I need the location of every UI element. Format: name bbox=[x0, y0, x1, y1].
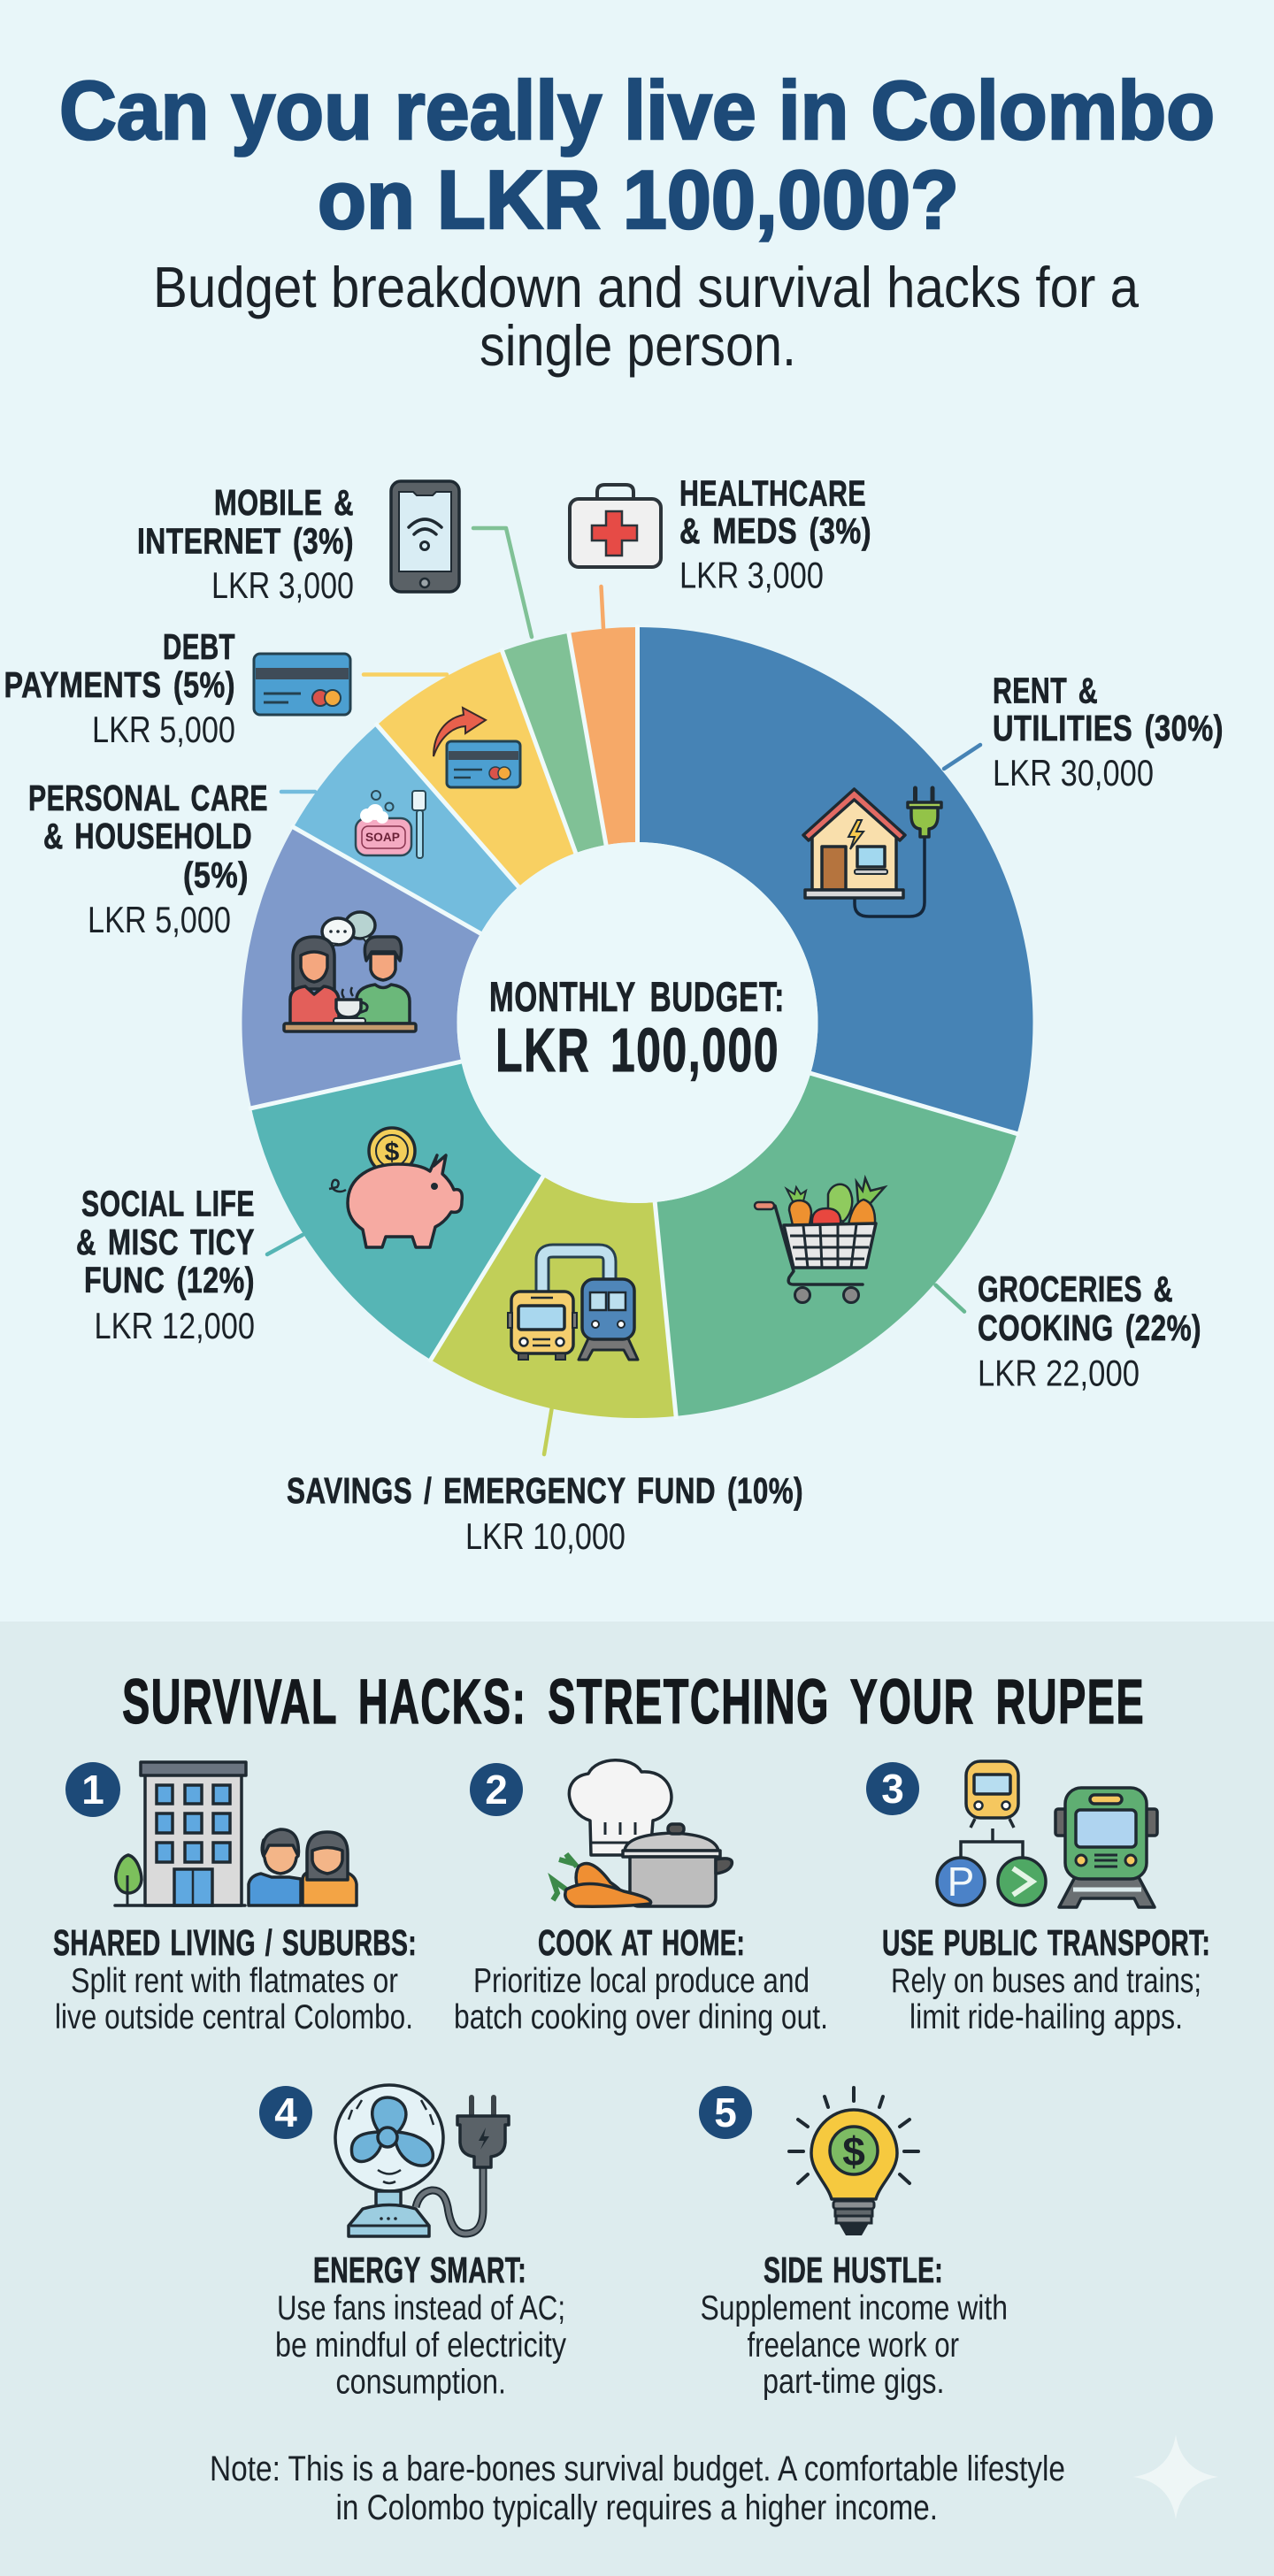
label: rent and utilities: LKR 30,000 bbox=[993, 752, 1154, 794]
label: social life and misc: LKR 12,000 bbox=[94, 1305, 255, 1346]
footnote bbox=[210, 2450, 1065, 2527]
label: savings and emergency fund: LKR 10,000 bbox=[465, 1515, 625, 1557]
text: cook at home: Prioritize local produce and bbox=[473, 1962, 810, 2000]
text: cook at home: batch cooking over dining out. bbox=[454, 1998, 828, 2036]
leader line: rent bbox=[944, 745, 980, 769]
label: groceries and cooking: LKR 22,000 bbox=[978, 1352, 1140, 1394]
icon: medical kit bbox=[570, 485, 661, 567]
icon: soap and toothbrush: SOAP bbox=[365, 830, 400, 844]
label: healthcare and meds: HEALTHCARE bbox=[679, 472, 866, 513]
leader line: social bbox=[267, 1235, 303, 1254]
leader line: debt bbox=[364, 672, 447, 677]
badge 4: 4 bbox=[274, 2089, 297, 2135]
label: mobile and internet bbox=[137, 482, 354, 606]
subtitle: Budget breakdown and survival hacks for a bbox=[153, 255, 1140, 319]
leader line: savings bbox=[544, 1409, 552, 1454]
footnote: in Colombo typically requires a higher income. bbox=[336, 2488, 938, 2527]
badge 2 bbox=[470, 1763, 523, 1816]
badge 5: 5 bbox=[714, 2089, 737, 2135]
label: healthcare and meds: & MEDS (3%) bbox=[679, 510, 871, 551]
label: mobile and internet: MOBILE & bbox=[214, 482, 354, 523]
hack 5: side hustle bbox=[699, 2086, 1008, 2401]
title: Can you really live in Colombo bbox=[59, 64, 1215, 157]
icon: apartment building with flatmates bbox=[115, 1762, 357, 1905]
text: shared living bbox=[53, 1922, 417, 2036]
text: cook at home bbox=[454, 1922, 828, 2036]
label: personal care and household: (5%) bbox=[183, 855, 249, 895]
badge 4 bbox=[259, 2086, 312, 2139]
label: rent and utilities: RENT & bbox=[993, 671, 1098, 711]
segment: personal care and household bbox=[294, 725, 518, 933]
icon: smartphone with wifi bbox=[391, 481, 459, 592]
icon: trains and route network: P bbox=[948, 1859, 974, 1905]
segment: rent and utilities bbox=[637, 627, 1032, 1134]
icon: sparkle watermark bbox=[1133, 2434, 1218, 2519]
text: energy smart: Use fans instead of AC; bbox=[277, 2289, 565, 2327]
label: groceries and cooking bbox=[978, 1269, 1201, 1394]
text: side hustle: freelance work or bbox=[747, 2327, 959, 2365]
label: rent and utilities bbox=[993, 671, 1224, 794]
text: side hustle: Supplement income with bbox=[701, 2289, 1008, 2327]
icon: shopping cart with vegetables bbox=[755, 1178, 885, 1302]
label: healthcare and meds: LKR 3,000 bbox=[679, 554, 824, 596]
centre label: monthly budget bbox=[489, 973, 785, 1085]
hack 2: cook at home bbox=[454, 1760, 828, 2036]
icon: trains and route network bbox=[937, 1761, 1157, 1907]
icon: bus and train bbox=[508, 1251, 638, 1360]
label: social life and misc: FUNC (12%) bbox=[84, 1260, 255, 1300]
leader line: personal care bbox=[281, 790, 315, 794]
icon: credit card with arrow bbox=[434, 708, 520, 787]
text: cook at home: COOK AT HOME: bbox=[538, 1922, 745, 1963]
label: social life and misc bbox=[76, 1184, 255, 1346]
label: debt payments bbox=[4, 626, 235, 750]
segment: healthcare and meds bbox=[569, 627, 637, 845]
icon: light bulb with dollar: $ bbox=[842, 2128, 865, 2174]
segment: social life people area bbox=[242, 827, 480, 1108]
label: debt payments: PAYMENTS (5%) bbox=[4, 664, 235, 705]
label: mobile and internet: LKR 3,000 bbox=[211, 564, 354, 606]
text: public transport: Rely on buses and trains; bbox=[891, 1962, 1201, 2000]
icon: soap and toothbrush bbox=[356, 791, 426, 858]
text: shared living: SHARED LIVING / SUBURBS: bbox=[53, 1922, 417, 1963]
text: side hustle: part-time gigs. bbox=[763, 2363, 945, 2401]
donut chart: monthly budget bbox=[242, 625, 1032, 1419]
hack 4: energy smart bbox=[259, 2085, 566, 2402]
text: side hustle: SIDE HUSTLE: bbox=[764, 2250, 943, 2290]
title: on LKR 100,000? bbox=[318, 153, 959, 246]
label: social life and misc: SOCIAL LIFE bbox=[81, 1184, 255, 1224]
footnote: Note: This is a bare-bones survival budget. A comfortable lifestyle bbox=[210, 2450, 1065, 2488]
leader line: mobile bbox=[473, 528, 532, 637]
segment: debt payments bbox=[377, 651, 576, 886]
icon: credit card label bbox=[254, 654, 350, 715]
hack 3: public transport bbox=[866, 1761, 1210, 2036]
label: groceries and cooking: GROCERIES & bbox=[978, 1269, 1173, 1309]
label: groceries and cooking: COOKING (22%) bbox=[978, 1307, 1201, 1348]
icon: piggy bank with coin bbox=[329, 1128, 462, 1247]
donut centre disc bbox=[457, 842, 817, 1203]
badge 1 bbox=[65, 1762, 120, 1817]
badge 1: 1 bbox=[81, 1767, 104, 1813]
centre label: monthly budget: LKR 100,000 bbox=[495, 1016, 779, 1085]
label: personal care and household: & HOUSEHOLD bbox=[43, 816, 252, 856]
text: shared living: live outside central Colombo. bbox=[55, 1998, 413, 2036]
label: personal care and household bbox=[28, 778, 268, 940]
text: public transport: limit ride-hailing apps. bbox=[909, 1998, 1183, 2036]
text: energy smart: ENERGY SMART: bbox=[313, 2250, 526, 2290]
label: debt payments: DEBT bbox=[163, 626, 235, 667]
icon: two people talking over coffee bbox=[284, 912, 416, 1031]
badge 3: 3 bbox=[881, 1766, 904, 1812]
segment: mobile and internet bbox=[503, 633, 606, 853]
label: savings and emergency fund bbox=[287, 1470, 803, 1557]
label: mobile and internet: INTERNET (3%) bbox=[137, 520, 354, 561]
text: energy smart: consumption. bbox=[336, 2364, 506, 2402]
label: healthcare and meds bbox=[679, 472, 871, 596]
text: shared living: Split rent with flatmates or bbox=[71, 1962, 398, 2000]
label: savings and emergency fund: SAVINGS / EMERGENCY FUND (10%) bbox=[287, 1470, 803, 1511]
segment: social life and misc bbox=[251, 1062, 543, 1360]
centre label: monthly budget: MONTHLY BUDGET: bbox=[489, 973, 785, 1020]
leader line: healthcare bbox=[602, 586, 603, 628]
segment: groceries and cooking bbox=[655, 1073, 1017, 1416]
text: energy smart bbox=[275, 2250, 566, 2402]
label: debt payments: LKR 5,000 bbox=[92, 709, 235, 750]
text: energy smart: be mindful of electricity bbox=[275, 2327, 566, 2365]
title bbox=[59, 64, 1215, 246]
badge 2: 2 bbox=[485, 1767, 508, 1813]
icon: electric fan and plug bbox=[335, 2085, 509, 2236]
leader line: groceries bbox=[936, 1285, 964, 1312]
label: personal care and household: LKR 5,000 bbox=[88, 899, 231, 940]
badge 3 bbox=[866, 1762, 919, 1815]
segment: savings and emergency fund bbox=[431, 1177, 676, 1418]
hack 1: shared living bbox=[53, 1762, 417, 2036]
icon: piggy bank with coin: $ bbox=[385, 1138, 400, 1167]
icon: chef hat, pot and carrots bbox=[553, 1760, 732, 1906]
icon: house with plug bbox=[803, 788, 941, 916]
text: public transport bbox=[882, 1922, 1210, 2036]
badge 5 bbox=[699, 2086, 752, 2139]
text: side hustle bbox=[701, 2250, 1008, 2401]
label: social life and misc: & MISC TICY bbox=[76, 1222, 255, 1262]
icon: light bulb with dollar bbox=[789, 2088, 918, 2235]
label: personal care and household: PERSONAL CARE bbox=[28, 778, 268, 818]
subtitle bbox=[153, 255, 1140, 378]
segment separators bbox=[249, 625, 1019, 1419]
subtitle: single person. bbox=[480, 313, 796, 378]
panel: survival hacks bbox=[0, 1622, 1274, 2576]
